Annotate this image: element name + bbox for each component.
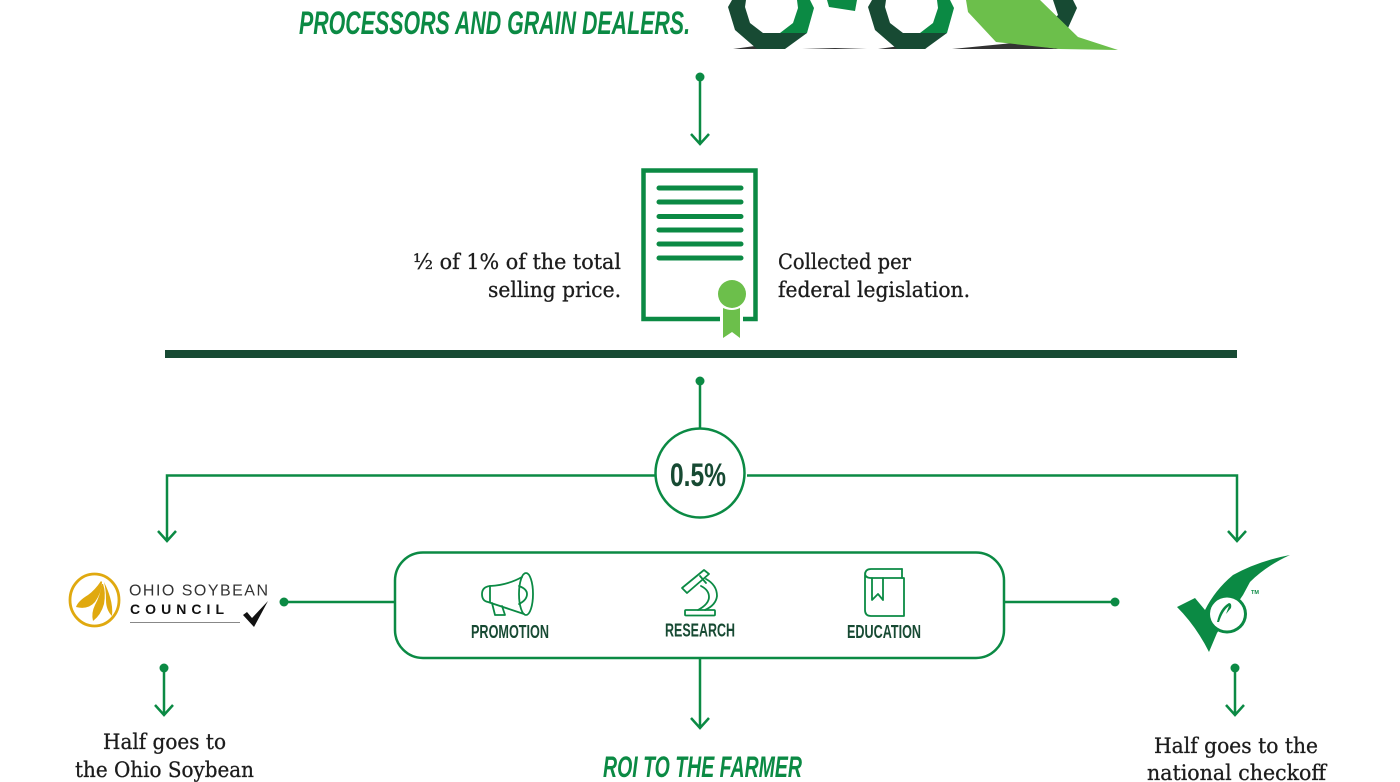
icon: microscope xyxy=(682,570,717,616)
connector: divider to percentage circle xyxy=(696,376,704,428)
panel: promotion research education xyxy=(395,552,1004,658)
percentage circle: 0.5% xyxy=(670,457,726,493)
text: collected per federal legislation: federal legislation. xyxy=(778,278,970,302)
percentage circle xyxy=(656,428,744,518)
heading: processors and grain dealers: PROCESSORS AND GRAIN DEALERS. xyxy=(299,5,690,41)
connector: panel to national checkoff xyxy=(1004,598,1120,606)
text: half of one percent: ½ of 1% of the total xyxy=(413,250,621,274)
arrow: split right xyxy=(747,476,1246,541)
arrow: logo to checkoff text xyxy=(1226,664,1244,715)
arrow: logo to Ohio Soybean text xyxy=(155,664,173,715)
icon: certificate xyxy=(644,170,756,338)
arrow: split left xyxy=(158,476,655,541)
logo: national soybean checkoff xyxy=(1177,555,1290,652)
text: half goes to national checkoff xyxy=(1147,734,1328,782)
arrow: tractor to certificate xyxy=(691,72,709,144)
icon: megaphone xyxy=(482,573,533,615)
text: half of one percent: selling price. xyxy=(488,278,621,302)
logo: Ohio Soybean Council: OHIO SOYBEAN xyxy=(129,582,268,600)
logo: Ohio Soybean Council xyxy=(70,574,268,627)
label: research: RESEARCH xyxy=(665,620,735,640)
label: education: EDUCATION xyxy=(847,622,921,642)
text: half goes to Ohio Soybean: the Ohio Soybean xyxy=(75,758,254,782)
text: collected per federal legislation: Collected per xyxy=(778,250,912,274)
text: half of one percent xyxy=(413,250,621,302)
icon: tractor xyxy=(728,0,1118,50)
text: collected per federal legislation xyxy=(778,250,970,302)
divider bar xyxy=(165,350,1237,358)
logo: Ohio Soybean Council: COUNCIL xyxy=(130,601,224,617)
connector: panel to Ohio Soybean Council xyxy=(280,598,395,606)
icon: book xyxy=(865,569,904,616)
arrow: panel to ROI xyxy=(691,658,709,728)
logo: national soybean checkoff: TM xyxy=(1251,590,1259,596)
text: half goes to Ohio Soybean xyxy=(75,730,254,782)
text: half goes to national checkoff: Half goes to the xyxy=(1154,734,1318,758)
text: half goes to Ohio Soybean: Half goes to xyxy=(103,730,226,754)
label: promotion: PROMOTION xyxy=(471,622,549,642)
